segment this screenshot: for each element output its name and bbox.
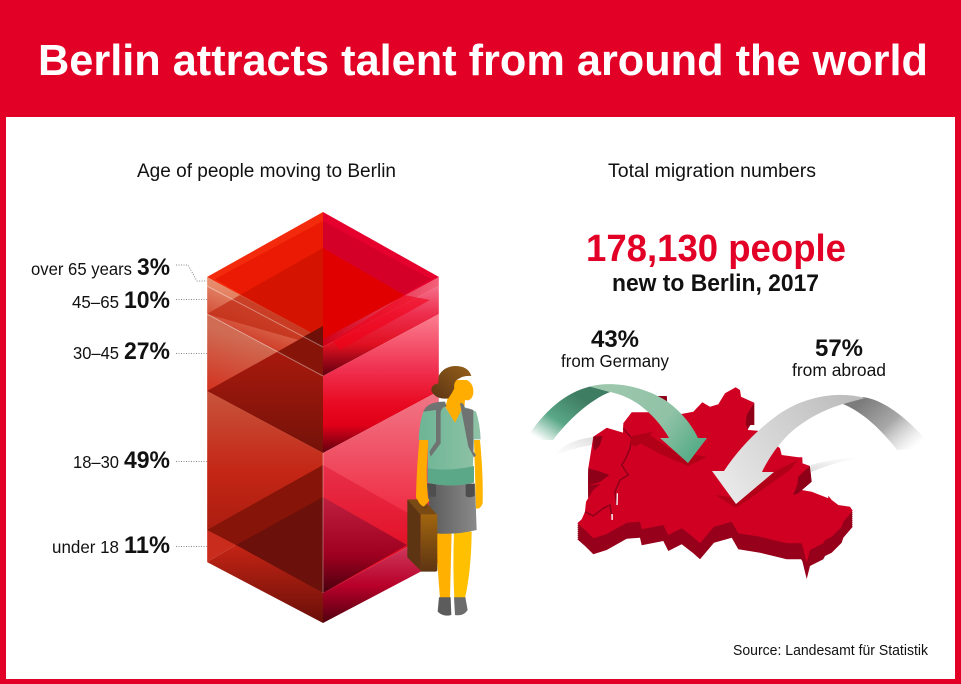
- open top: back walls: [207, 212, 439, 345]
- label: over 65 years 3%: 3%: [137, 254, 170, 281]
- left front face: [207, 277, 323, 623]
- label: 57% from abroad: from abroad: [792, 360, 886, 380]
- title: Berlin attracts talent from around the world: [38, 36, 928, 85]
- hair: [431, 366, 471, 399]
- suitcase: [407, 499, 421, 571]
- map side walls: [588, 396, 812, 495]
- label: 43% from Germany: from Germany: [561, 351, 669, 371]
- label: 43% from Germany: 43%: [591, 326, 639, 353]
- label: 18-30 49%: 49%: [124, 447, 170, 474]
- river detail: [585, 428, 632, 517]
- label: under 18 11%: 11%: [124, 532, 170, 559]
- label: 30-45 27%: 27%: [124, 338, 170, 365]
- label: 45-65 10%: [72, 287, 170, 314]
- label: 43% from Germany: [561, 326, 669, 371]
- person with suitcase: [407, 366, 483, 616]
- arms: [416, 440, 428, 507]
- Berlin map with arrows: [525, 384, 933, 579]
- stacked isometric age column: [207, 212, 439, 623]
- legs: [436, 532, 452, 598]
- heading: total migration numbers: Total migration numbers: [608, 161, 816, 182]
- heading: age of people moving to Berlin: Age of people moving to Berlin: [137, 161, 396, 182]
- grey arrow: abroad: [712, 395, 933, 504]
- label: 30-45 27%: 30–45: [73, 343, 119, 363]
- age labels: [31, 254, 170, 559]
- label: over 65 years 3%: [31, 254, 170, 281]
- label: 18-30 49%: 18–30: [73, 452, 119, 472]
- column edge highlights: [207, 277, 439, 593]
- shoes: [438, 597, 451, 616]
- right front face: [323, 277, 439, 623]
- head and neck: [445, 380, 473, 423]
- label: over 65 years 3%: over 65 years: [31, 259, 132, 279]
- label: 45-65 10%: 10%: [124, 287, 170, 314]
- arrow shadows on white: [553, 437, 594, 457]
- backpack straps: [423, 402, 476, 457]
- shirt: [419, 407, 481, 485]
- label: 57% from abroad: [792, 335, 886, 380]
- source note: Source: Landesamt für Statistik: [733, 642, 928, 659]
- skirt: [427, 483, 477, 534]
- label: 18-30 49%: [73, 447, 170, 474]
- label: under 18 11%: under 18: [52, 537, 119, 557]
- big number: 178,130 people: 178,130 people: [586, 228, 846, 270]
- subheading: new to Berlin, 2017: new to Berlin, 2017: [612, 270, 819, 297]
- label: 45-65 10%: 45–65: [72, 292, 119, 312]
- map extrusion: [577, 389, 853, 579]
- label: 57% from abroad: 57%: [815, 335, 863, 362]
- label: 30-45 27%: [73, 338, 170, 365]
- map top surface: [577, 387, 853, 563]
- arrow shadows on map: [640, 435, 707, 466]
- green arrow: Germany: [525, 384, 707, 463]
- label: under 18 11%: [52, 532, 170, 559]
- hand: [416, 493, 429, 507]
- leader lines: [176, 265, 207, 546]
